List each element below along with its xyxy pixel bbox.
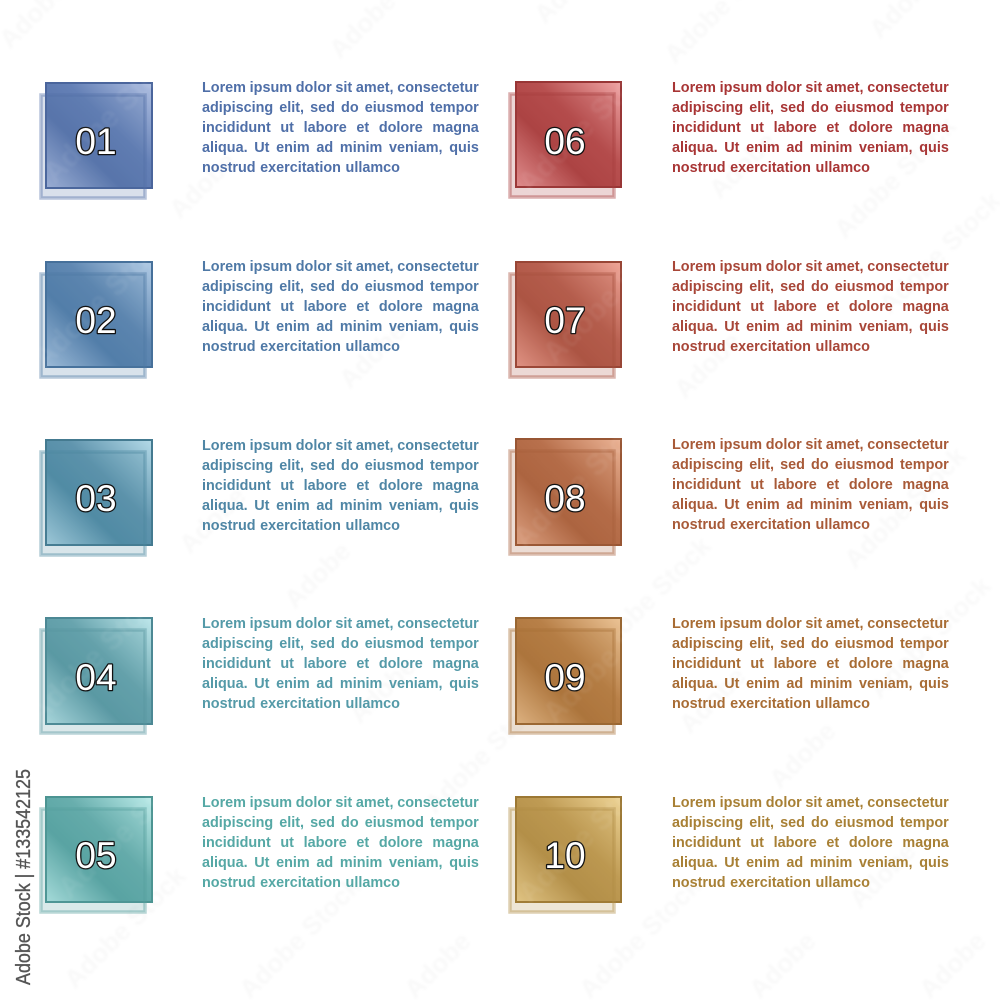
watermark: background stock marks: Adobe Stock — [828, 110, 962, 244]
watermark: background stock marks: Adobe Stock — [418, 685, 552, 819]
watermark: marks over squares: Adobe Stock — [512, 47, 665, 200]
text block 06: aliqua. Ut enim ad minim veniam, quis — [672, 140, 949, 156]
text block 07: incididunt ut labore et dolore magna — [672, 299, 950, 315]
text block 02: aliqua. Ut enim ad minim veniam, quis — [202, 319, 479, 335]
text block 03: Lorem ipsum dolor sit amet, consectetur — [202, 438, 479, 454]
text block 08: adipiscing elit, sed do eiusmod tempor — [672, 457, 949, 473]
watermark: background stock marks: Adobe — [163, 146, 241, 224]
watermark: marks over squares: Adobe Stock — [52, 752, 205, 905]
icon: square 07 — [510, 262, 621, 377]
icon: square 03 — [41, 440, 152, 555]
text block 08: aliqua. Ut enim ad minim veniam, quis — [672, 497, 949, 513]
item 04 — [41, 616, 480, 733]
text block 04: adipiscing elit, sed do eiusmod tempor — [202, 636, 479, 652]
watermark: marks over squares: Adobe Stock — [507, 402, 660, 555]
text block 03 — [202, 438, 480, 534]
text block 10: nostrud exercitation ullamco — [672, 875, 870, 891]
watermark: background stock marks: Adobe — [843, 836, 921, 914]
icon: square 06: 06 — [544, 121, 586, 162]
stock credit: vertical text: Adobe Stock | #133542125 — [13, 769, 35, 985]
text block 06: incididunt ut labore et dolore magna — [672, 120, 950, 136]
text block 05: adipiscing elit, sed do eiusmod tempor — [202, 815, 479, 831]
text block 04: nostrud exercitation ullamco — [202, 696, 400, 712]
text block 04 — [202, 616, 480, 712]
item 02 — [41, 259, 480, 377]
icon: square 01: 01 — [75, 121, 117, 162]
text block 05: aliqua. Ut enim ad minim veniam, quis — [202, 855, 479, 871]
watermark: background stock marks: Adobe — [703, 126, 781, 204]
watermark: marks over squares — [22, 37, 690, 910]
icon: square 04 — [41, 618, 152, 733]
watermark: background stock marks: Adobe — [763, 716, 841, 794]
item 05 — [41, 795, 480, 912]
text block 10: adipiscing elit, sed do eiusmod tempor — [672, 815, 949, 831]
watermark: background stock marks: Adobe Stock — [58, 860, 192, 994]
icon: square 07: 07 — [544, 300, 586, 341]
watermark: marks over squares: Adobe Stock — [537, 217, 690, 370]
text block 02: nostrud exercitation ullamco — [202, 339, 400, 355]
icon: square 02 — [41, 262, 152, 377]
icon: square 05 — [41, 797, 152, 912]
text block 08 — [672, 437, 950, 533]
item 03 — [41, 438, 480, 555]
text block 05: incididunt ut labore et dolore magna — [202, 835, 480, 851]
text block 01: adipiscing elit, sed do eiusmod tempor — [202, 100, 479, 116]
watermark: marks over squares: Adobe Stock — [512, 757, 665, 910]
icon: square 08: 08 — [544, 478, 586, 519]
text block 02: incididunt ut labore et dolore magna — [202, 299, 480, 315]
text block 01: incididunt ut labore et dolore magna — [202, 120, 480, 136]
text block 09: incididunt ut labore et dolore magna — [672, 656, 950, 672]
text block 07: Lorem ipsum dolor sit amet, consectetur — [672, 259, 949, 275]
icon: square 01 — [41, 83, 152, 198]
icon: square 04: 04 — [75, 657, 117, 698]
text block 08: incididunt ut labore et dolore magna — [672, 477, 950, 493]
text block 01: aliqua. Ut enim ad minim veniam, quis — [202, 140, 479, 156]
text block 09: Lorem ipsum dolor sit amet, consectetur — [672, 616, 949, 632]
item 08 — [510, 437, 950, 554]
text block 02: Lorem ipsum dolor sit amet, consectetur — [202, 259, 479, 275]
watermark: marks over squares: Adobe Stock — [37, 37, 190, 190]
icon: square 10: 10 — [544, 835, 586, 876]
icon: square 09: 09 — [544, 657, 586, 698]
text block 05: nostrud exercitation ullamco — [202, 875, 400, 891]
text block 10 — [672, 795, 950, 891]
watermark: marks over squares: Adobe Stock — [27, 222, 180, 375]
text block 09: nostrud exercitation ullamco — [672, 696, 870, 712]
item 01 — [41, 80, 480, 198]
icon: square 10 — [510, 797, 621, 912]
icon: square 08 — [510, 439, 621, 554]
text block 09: aliqua. Ut enim ad minim veniam, quis — [672, 676, 949, 692]
text block 07: nostrud exercitation ullamco — [672, 339, 870, 355]
icon: square 05: 05 — [75, 835, 117, 876]
watermark: marks over squares: Adobe Stock — [537, 577, 690, 730]
text block 06 — [672, 80, 950, 176]
text block 06: Lorem ipsum dolor sit amet, consectetur — [672, 80, 949, 96]
text block 08: Lorem ipsum dolor sit amet, consectetur — [672, 437, 949, 453]
text block 07 — [672, 259, 950, 355]
watermark: background stock marks: Adobe Stock — [583, 530, 717, 664]
text block 05 — [202, 795, 480, 891]
item 06 — [510, 80, 950, 197]
icon: square 03: 03 — [75, 478, 117, 519]
text block 01 — [202, 80, 480, 176]
text block 04: incididunt ut labore et dolore magna — [202, 656, 480, 672]
watermark: background stock marks: Adobe — [673, 661, 751, 739]
text block 07: aliqua. Ut enim ad minim veniam, quis — [672, 319, 949, 335]
watermark: background stock marks: Adobe — [668, 326, 746, 404]
text block 03: incididunt ut labore et dolore magna — [202, 478, 480, 494]
item 09 — [510, 616, 950, 733]
text block 04: Lorem ipsum dolor sit amet, consectetur — [202, 616, 479, 632]
text block 03: aliqua. Ut enim ad minim veniam, quis — [202, 498, 479, 514]
item 10 — [510, 795, 950, 912]
text block 10: Lorem ipsum dolor sit amet, consectetur — [672, 795, 949, 811]
text block 06: nostrud exercitation ullamco — [672, 160, 870, 176]
watermark: background stock marks: Adobe — [278, 536, 356, 614]
text block 04: aliqua. Ut enim ad minim veniam, quis — [202, 676, 479, 692]
icon: square 09 — [510, 618, 621, 733]
text block 09 — [672, 616, 950, 712]
text block 09: adipiscing elit, sed do eiusmod tempor — [672, 636, 949, 652]
watermark: background stock marks: Adobe Stock — [863, 570, 997, 704]
icon: square 06 — [510, 82, 621, 197]
text block 02 — [202, 259, 480, 355]
text block 01: Lorem ipsum dolor sit amet, consectetur — [202, 80, 479, 96]
text block 03: adipiscing elit, sed do eiusmod tempor — [202, 458, 479, 474]
text block 10: aliqua. Ut enim ad minim veniam, quis — [672, 855, 949, 871]
watermark: background stock marks: Adobe Stock — [838, 440, 972, 574]
watermark: background stock marks: Adobe — [173, 481, 251, 559]
watermark: background stock marks: Adobe — [333, 316, 411, 394]
text block 06: adipiscing elit, sed do eiusmod tempor — [672, 100, 949, 116]
text block 01: nostrud exercitation ullamco — [202, 160, 400, 176]
text block 07: adipiscing elit, sed do eiusmod tempor — [672, 279, 949, 295]
text block 10: incididunt ut labore et dolore magna — [672, 835, 950, 851]
watermark: marks over squares: Adobe Stock — [22, 577, 175, 730]
text block 02: adipiscing elit, sed do eiusmod tempor — [202, 279, 479, 295]
text block 03: nostrud exercitation ullamco — [202, 518, 400, 534]
watermark: background stock marks: Adobe — [343, 651, 421, 729]
text block 08: nostrud exercitation ullamco — [672, 517, 870, 533]
item 07 — [510, 259, 950, 377]
text block 05: Lorem ipsum dolor sit amet, consectetur — [202, 795, 479, 811]
icon: square 02: 02 — [75, 300, 117, 341]
